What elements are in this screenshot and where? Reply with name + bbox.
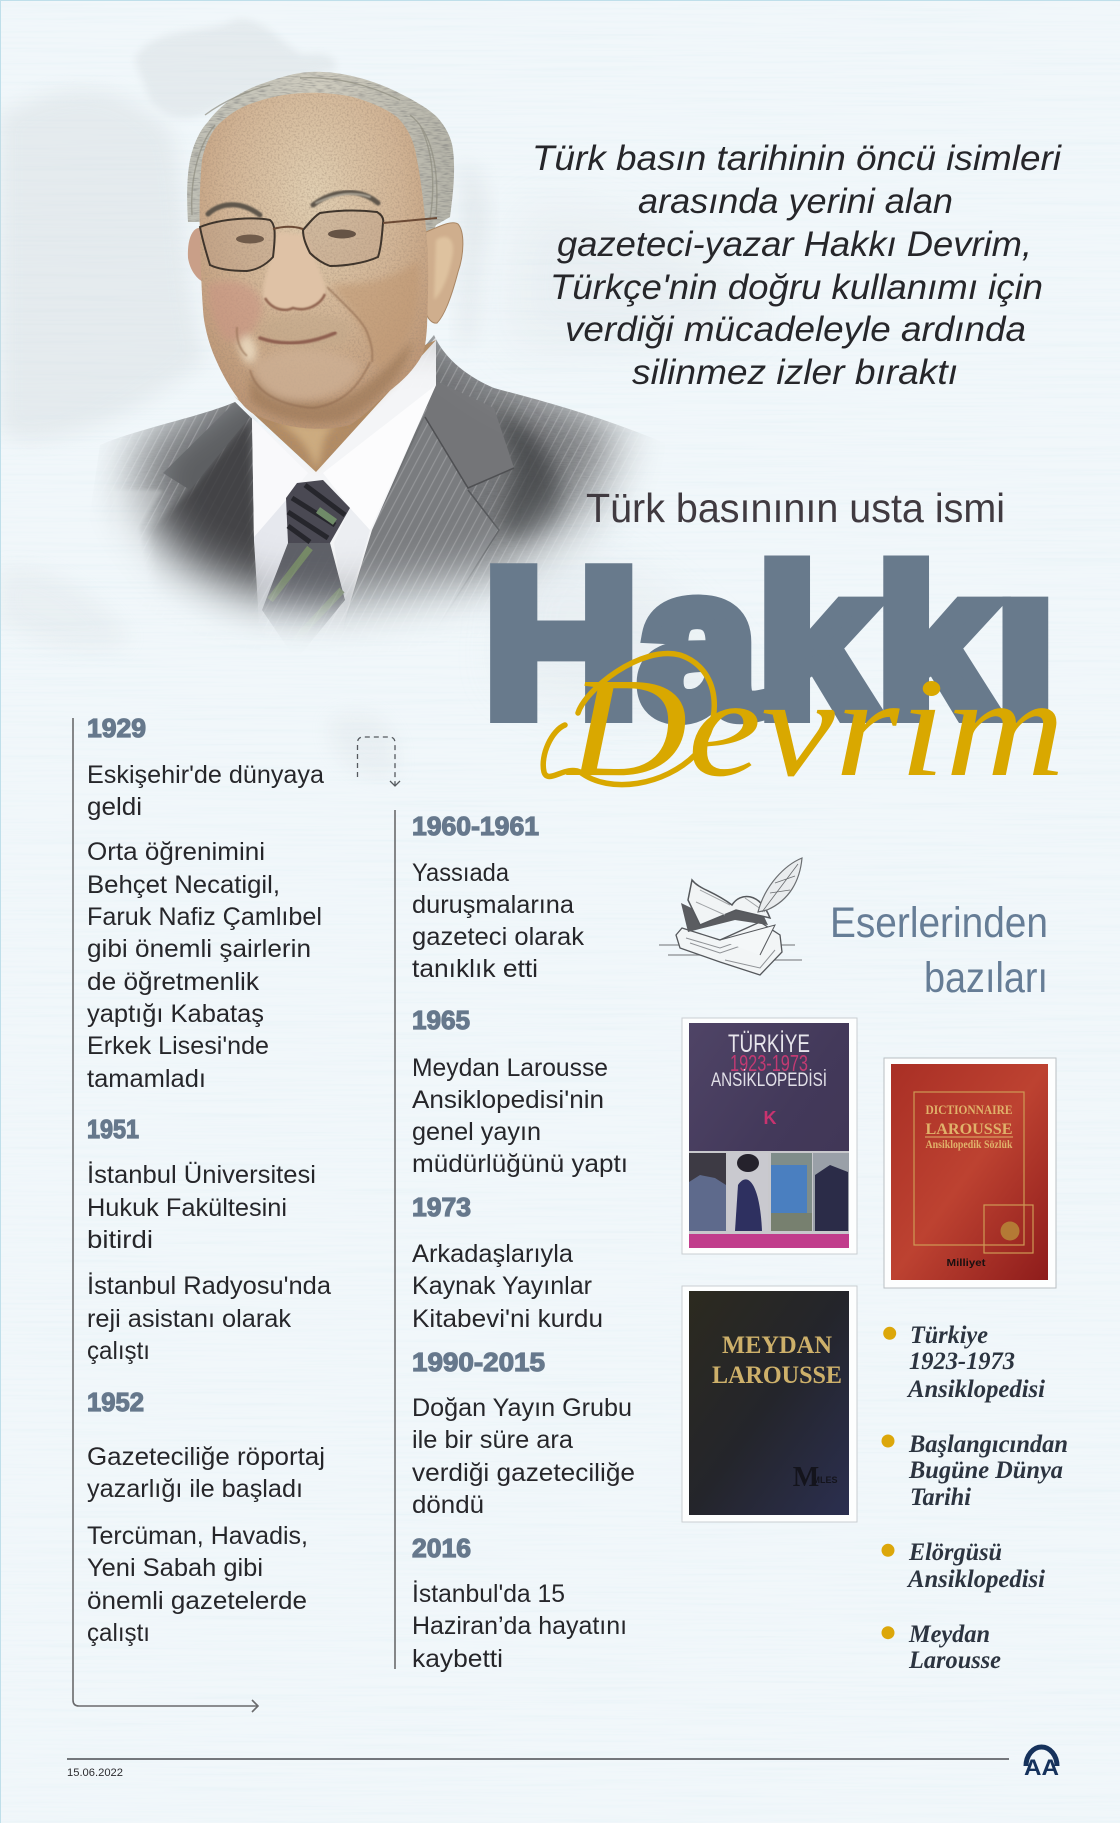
- intro quote: Türk basın tarihinin öncü isimleri: [532, 139, 1062, 178]
- entry 1960-1961: duruşmalarına: [412, 891, 574, 919]
- work: Türkiye 1923-1973 Ansiklopedisi: Ansiklopedisi: [906, 1376, 1045, 1403]
- work: Başlangıcından Bugüne Dünya Tarihi: Başlangıcından: [908, 1431, 1068, 1458]
- hair strands: [192, 78, 437, 220]
- icon: books and quill: [659, 858, 802, 975]
- work: Meydan Larousse: Larousse: [908, 1647, 1001, 1674]
- work: Elörgüsü Ansiklopedisi: Elörgüsü: [908, 1539, 1002, 1566]
- entry 1960-1961: tanıklık etti: [412, 955, 538, 983]
- footer rule: [67, 1758, 1009, 1760]
- heading: Eserlerinden bazıları: Eserlerinden: [830, 899, 1048, 947]
- entry 1973: Kitabevi'ni kurdu: [412, 1305, 603, 1333]
- portrait of Hakkı Devrim: [60, 72, 700, 720]
- work: Türkiye 1923-1973 Ansiklopedisi: 1923-1973: [909, 1348, 1015, 1375]
- eyeglasses: [200, 211, 437, 271]
- entry 1929: Faruk Nafiz Çamlıbel: [87, 903, 322, 931]
- book cover: Türkiye 1923-1973 Ansiklopedisi: [682, 1018, 857, 1254]
- entry 1929: geldi: [87, 793, 142, 821]
- entry 1929: de öğretmenlik: [87, 968, 260, 996]
- list of works: [882, 1322, 1068, 1674]
- entry 1965: [412, 1005, 628, 1178]
- entry 1929: Erkek Lisesi'nde: [87, 1032, 269, 1060]
- entry 1973: Arkadaşlarıyla: [412, 1240, 573, 1268]
- entry 1929: [87, 713, 324, 1093]
- timeline axis left with arrow: [73, 718, 258, 1712]
- heading: Eserlerinden bazıları: [830, 899, 1048, 1002]
- entry 1965: müdürlüğünü yaptı: [412, 1150, 628, 1178]
- book cover: Meydan Larousse: LAROUSSE: [712, 1362, 842, 1389]
- entry 1929: Eskişehir'de dünyaya: [87, 761, 324, 789]
- timeline column 1: [87, 713, 331, 1647]
- entry 1929: yaptığı Kabataş: [87, 1000, 264, 1028]
- work: Elörgüsü Ansiklopedisi: [882, 1539, 1045, 1593]
- mouth: [260, 333, 335, 343]
- book cover: Meydan Larousse: M: [793, 1462, 819, 1493]
- work: Başlangıcından Bugüne Dünya Tarihi: [882, 1431, 1068, 1511]
- book cover: Türkiye 1923-1973 Ansiklopedisi: 1923-1973: [730, 1050, 808, 1076]
- entry 1973: Kaynak Yayınlar: [412, 1272, 592, 1300]
- entry 1929: 1929: [87, 713, 146, 743]
- book cover: Dictionnaire Larousse: Ansiklopedik Sözlük: [926, 1137, 1013, 1151]
- intro quote: gazeteci-yazar Hakkı Devrim,: [557, 225, 1032, 264]
- entry 1990-2015: döndü: [412, 1491, 484, 1519]
- title: Devrim: Devrim: [566, 648, 1065, 806]
- logo: AA: AA: [1024, 1755, 1059, 1780]
- entry 1952: Tercüman, Havadis,: [87, 1522, 308, 1550]
- book cover: Dictionnaire Larousse: DICTIONNAIRE: [926, 1102, 1012, 1117]
- entry 1952: 1952: [87, 1387, 144, 1417]
- dashed connector arrow: [358, 737, 400, 786]
- title: Hakkı: Hakkı: [484, 527, 1055, 760]
- book cover: Dictionnaire Larousse: Milliyet: [946, 1258, 986, 1269]
- entry 1990-2015: verdiği gazeteciliğe: [412, 1459, 635, 1487]
- facial shading: [208, 260, 419, 423]
- entry 1990-2015: Doğan Yayın Grubu: [412, 1394, 632, 1422]
- logo: AA: [1024, 1747, 1059, 1780]
- subtitle: Türk basınının usta ismi: [586, 485, 1005, 531]
- entry 1965: genel yayın: [412, 1118, 541, 1146]
- book cover: Meydan Larousse: [682, 1286, 857, 1522]
- entry 2016: Haziran’da hayatını: [412, 1612, 627, 1640]
- eyebrows: [208, 193, 378, 215]
- timeline column 2: [412, 811, 635, 1673]
- entry 1951: çalıştı: [87, 1337, 150, 1365]
- ear right: [426, 223, 463, 323]
- entry 1965: Ansiklopedisi'nin: [412, 1086, 604, 1114]
- entry 1960-1961: gazeteci olarak: [412, 923, 585, 951]
- entry 1990-2015: [412, 1347, 635, 1519]
- book cover: Dictionnaire Larousse: [884, 1058, 1056, 1288]
- entry 1929: gibi önemli şairlerin: [87, 935, 311, 963]
- entry 1951: Hukuk Fakültesini: [87, 1194, 287, 1222]
- entry 1965: 1965: [412, 1005, 470, 1035]
- entry 1929: Behçet Necatigil,: [87, 871, 280, 899]
- entry 1951: İstanbul Üniversitesi: [87, 1160, 316, 1189]
- footer date: 15.06.2022: [67, 1767, 123, 1779]
- wrinkle lines: [237, 287, 372, 408]
- book cover: Türkiye 1923-1973 Ansiklopedisi: TÜRKİYE: [728, 1029, 810, 1058]
- book cover: Türkiye 1923-1973 Ansiklopedisi: ANSİKLOPEDİSİ: [711, 1070, 827, 1091]
- nose: [263, 232, 326, 310]
- work: Başlangıcından Bugüne Dünya Tarihi: Bugüne Dünya: [908, 1457, 1063, 1484]
- entry 1973: [412, 1192, 603, 1333]
- intro quote: Türkçe'nin doğru kullanımı için: [550, 268, 1043, 307]
- entry 1990-2015: ile bir süre ara: [412, 1426, 573, 1454]
- entry 1951: İstanbul Radyosu'nda: [87, 1271, 331, 1300]
- entry 1929: tamamladı: [87, 1065, 206, 1093]
- hair: [187, 72, 454, 243]
- entry 1951: [87, 1114, 331, 1365]
- work: Elörgüsü Ansiklopedisi: Ansiklopedisi: [906, 1566, 1045, 1593]
- entry 2016: İstanbul'da 15: [412, 1579, 565, 1608]
- entry 1952: önemli gazetelerde: [87, 1587, 307, 1615]
- face: [200, 93, 428, 429]
- intro quote: [532, 139, 1062, 392]
- entry 2016: 2016: [412, 1533, 471, 1563]
- watercolor wash behind portrait: [0, 20, 770, 776]
- jacket: [103, 335, 646, 634]
- ear left: [188, 228, 203, 282]
- book cover: Meydan Larousse: MLES: [812, 1475, 838, 1485]
- entry 1951: 1951: [87, 1114, 139, 1144]
- shirt with collar: [252, 338, 436, 634]
- entry 2016: kaybetti: [412, 1645, 503, 1673]
- entry 1960-1961: [412, 811, 585, 983]
- eyes: [236, 230, 356, 244]
- entry 1990-2015: 1990-2015: [412, 1347, 545, 1377]
- book cover: Dictionnaire Larousse: LAROUSSE: [926, 1121, 1012, 1138]
- entry 1952: yazarlığı ile başladı: [87, 1475, 303, 1503]
- work: Türkiye 1923-1973 Ansiklopedisi: [883, 1322, 1045, 1403]
- neck: [233, 340, 436, 472]
- necktie: [262, 480, 350, 634]
- entry 1952: çalıştı: [87, 1619, 150, 1647]
- entry 1951: reji asistanı olarak: [87, 1305, 291, 1333]
- timeline axis right: [394, 810, 396, 1669]
- entry 1952: [87, 1387, 325, 1647]
- work: Meydan Larousse: [882, 1621, 1001, 1674]
- book cover: Türkiye 1923-1973 Ansiklopedisi: K: [764, 1108, 776, 1128]
- intro quote: silinmez izler bıraktı: [632, 353, 958, 392]
- entry 1960-1961: 1960-1961: [412, 811, 539, 841]
- entry 1952: Yeni Sabah gibi: [87, 1554, 263, 1582]
- entry 1960-1961: Yassıada: [412, 859, 509, 887]
- entry 1951: bitirdi: [87, 1226, 153, 1254]
- entry 1973: 1973: [412, 1192, 471, 1222]
- entry 2016: [412, 1533, 627, 1673]
- heading: Eserlerinden bazıları: bazıları: [924, 954, 1048, 1002]
- entry 1929: Orta öğrenimini: [87, 838, 265, 866]
- intro quote: arasında yerini alan: [638, 182, 953, 221]
- work: Türkiye 1923-1973 Ansiklopedisi: Türkiye: [910, 1322, 988, 1349]
- intro quote: verdiği mücadeleyle ardında: [565, 310, 1026, 349]
- entry 1952: Gazeteciliğe röportaj: [87, 1443, 325, 1471]
- work: Başlangıcından Bugüne Dünya Tarihi: Tarihi: [910, 1484, 971, 1511]
- entry 1965: Meydan Larousse: [412, 1054, 608, 1082]
- ear inner: [434, 237, 453, 300]
- book cover: Meydan Larousse: MEYDAN: [722, 1332, 832, 1359]
- work: Meydan Larousse: Meydan: [908, 1621, 990, 1648]
